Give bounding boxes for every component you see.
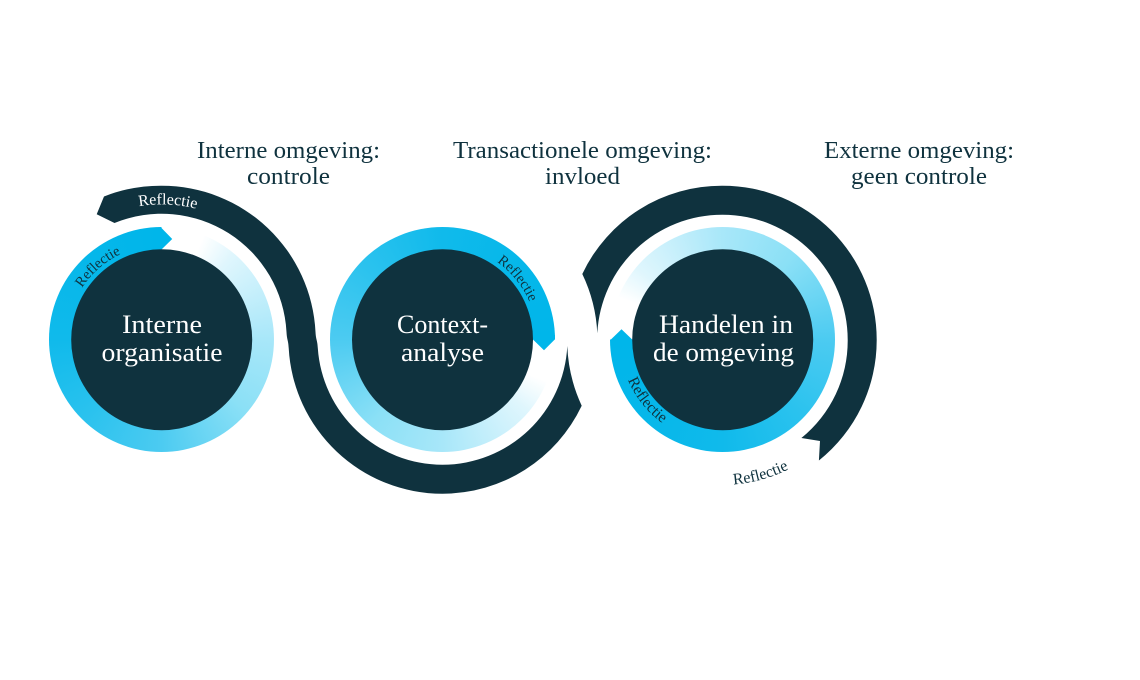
gradient ring: interne organisatie xyxy=(49,227,274,452)
circle: contextanalyse: Context- xyxy=(397,310,488,339)
circle: handelen in de omgeving: de omgeving xyxy=(653,338,794,367)
heading: transactionele omgeving: Transactionele omgeving: xyxy=(453,138,712,164)
heading: interne omgeving: controle xyxy=(247,164,330,190)
label: reflectie on dark band: Reflectie xyxy=(138,193,197,208)
circle: interne organisatie: organisatie xyxy=(102,338,222,367)
label: reflectie on ring 2: Reflectie xyxy=(498,254,535,302)
heading: transactionele omgeving: invloed xyxy=(545,164,620,190)
heading: interne omgeving: Interne omgeving: xyxy=(197,138,380,164)
arrow head: ring 3 xyxy=(610,329,633,345)
heading: externe omgeving xyxy=(824,138,1014,190)
label: reflectie below third arrow: Reflectie xyxy=(732,463,788,484)
gradient ring: contextanalyse xyxy=(330,227,555,452)
arrow head: ring 2 xyxy=(533,335,555,350)
heading: interne omgeving xyxy=(197,138,380,190)
label: reflectie on ring 1: Reflectie xyxy=(74,248,120,288)
heading: transactionele omgeving xyxy=(453,138,712,190)
arrow head: ring 1 xyxy=(158,227,172,250)
circle: handelen in de omgeving: Handelen in xyxy=(659,310,793,339)
circle: interne organisatie: Interne xyxy=(122,310,202,339)
circle: contextanalyse xyxy=(352,249,533,430)
circle: contextanalyse: analyse xyxy=(401,338,484,367)
dark S-shaped arrow band xyxy=(97,186,582,494)
circle: interne organisatie xyxy=(71,249,252,430)
heading: externe omgeving: Externe omgeving: xyxy=(824,138,1014,164)
circle: handelen in de omgeving xyxy=(632,249,813,430)
heading: externe omgeving: geen controle xyxy=(851,164,987,190)
dark arrow band around third circle xyxy=(582,186,877,460)
label: reflectie on ring 3: Reflectie xyxy=(628,376,666,422)
gradient ring: handelen in de omgeving xyxy=(610,227,835,452)
